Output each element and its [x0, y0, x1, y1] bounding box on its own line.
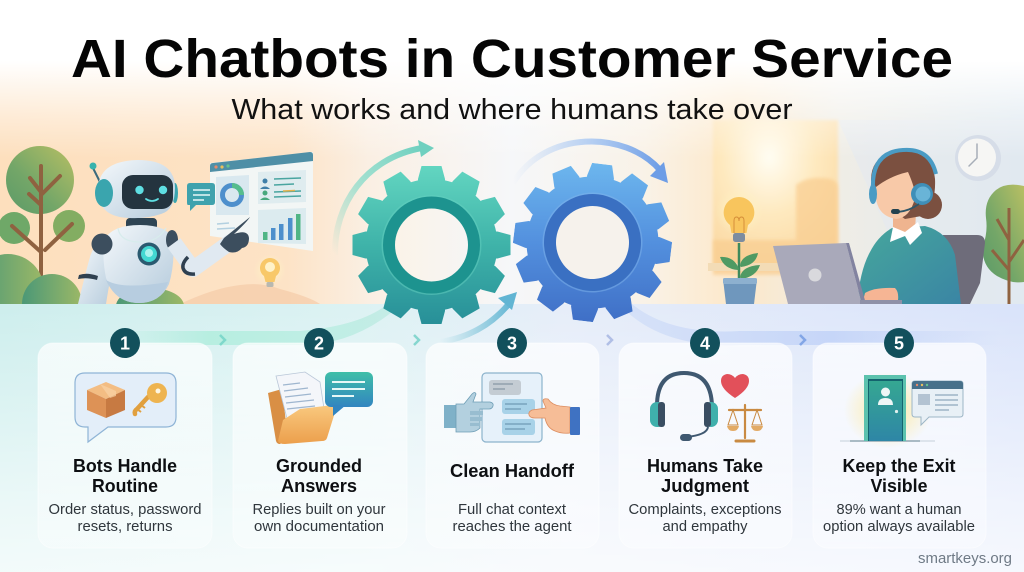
icon: robot speech bubble	[187, 183, 215, 211]
illustration: robot	[78, 160, 250, 304]
heading: Grounded Answers: Grounded	[276, 456, 362, 476]
description: Replies built on your	[252, 502, 386, 518]
heading: Keep the Exit Visible: Visible	[870, 476, 928, 496]
scene background	[0, 0, 1024, 304]
icon: handoff between robot and human hand	[444, 373, 580, 442]
title: AI Chatbots in Customer Service	[71, 29, 953, 89]
description	[252, 502, 386, 535]
description: reaches the agent	[452, 519, 572, 535]
description	[48, 502, 202, 535]
step number 3: 3	[507, 334, 517, 354]
step number 4: 4	[700, 334, 710, 354]
lower band background	[0, 304, 1024, 572]
card 5	[813, 328, 986, 548]
description: Order status, password	[48, 502, 202, 518]
illustration: support agent	[773, 150, 985, 304]
illustration: plant with light bulb	[715, 188, 763, 304]
description: Complaints, exceptions	[628, 502, 782, 518]
description	[452, 502, 572, 535]
heading: Grounded Answers	[276, 456, 362, 496]
heading: Bots Handle Routine	[73, 456, 177, 496]
icon: teal gear	[352, 165, 512, 325]
arrow: chevron 1 to 2	[220, 335, 225, 345]
arrow: blue gear curve	[513, 141, 668, 183]
description: Full chat context	[458, 502, 566, 518]
description	[628, 502, 782, 535]
heading: Keep the Exit Visible	[842, 456, 956, 496]
icon: exit door with chat window	[840, 372, 963, 448]
step number 3	[497, 328, 527, 358]
flow band: teal swoosh	[110, 304, 392, 345]
arrow: teal gear curve	[335, 140, 434, 255]
heading: Humans Take Judgment	[647, 456, 763, 496]
arrow: chevron 2 to 3	[414, 335, 419, 345]
step number 1	[110, 328, 140, 358]
step number 5: 5	[894, 334, 904, 354]
description: resets, returns	[78, 519, 172, 535]
icon: package and key bubble	[75, 373, 176, 442]
icon: folder with chat bubble	[268, 372, 373, 444]
heading: Humans Take Judgment: Humans Take	[647, 456, 763, 476]
description	[823, 502, 975, 535]
description: option always available	[823, 519, 975, 535]
heading: Humans Take Judgment: Judgment	[661, 476, 749, 496]
arrow: chevron 3 to 4	[607, 335, 612, 345]
icon: wall clock	[955, 135, 1001, 181]
heading: Bots Handle Routine: Bots Handle	[73, 456, 177, 476]
step number 4	[690, 328, 720, 358]
step number 2: 2	[314, 334, 324, 354]
illustration: left tree and bushes	[0, 146, 184, 304]
illustration: right tree	[983, 185, 1024, 304]
step number 1: 1	[120, 334, 130, 354]
icon: headset with heart and scales	[650, 373, 763, 441]
card 1	[38, 328, 212, 548]
heading: Bots Handle Routine: Routine	[92, 476, 158, 496]
description: own documentation	[254, 519, 384, 535]
description: 89% want a human	[836, 502, 962, 518]
illustration: dashboard screen	[210, 152, 313, 251]
flow band: blue swoosh	[625, 304, 1000, 345]
heading: Clean Handoff: Clean Handoff	[450, 461, 575, 481]
website credit: smartkeys.org	[918, 551, 1012, 567]
arrow: lower connector curve	[440, 292, 517, 342]
heading: Grounded Answers: Answers	[281, 476, 357, 496]
card 2	[233, 328, 407, 548]
description: and empathy	[662, 519, 748, 535]
arrow: chevron 4 to 5	[800, 335, 805, 345]
step number 5	[884, 328, 914, 358]
icon: small light bulb left	[254, 254, 286, 287]
subtitle: What works and where humans take over	[232, 94, 793, 126]
step number 2	[304, 328, 334, 358]
card 3	[426, 328, 599, 548]
icon: blue gear	[513, 163, 672, 322]
card 4	[619, 328, 792, 548]
heading: Keep the Exit Visible: Keep the Exit	[842, 456, 956, 476]
